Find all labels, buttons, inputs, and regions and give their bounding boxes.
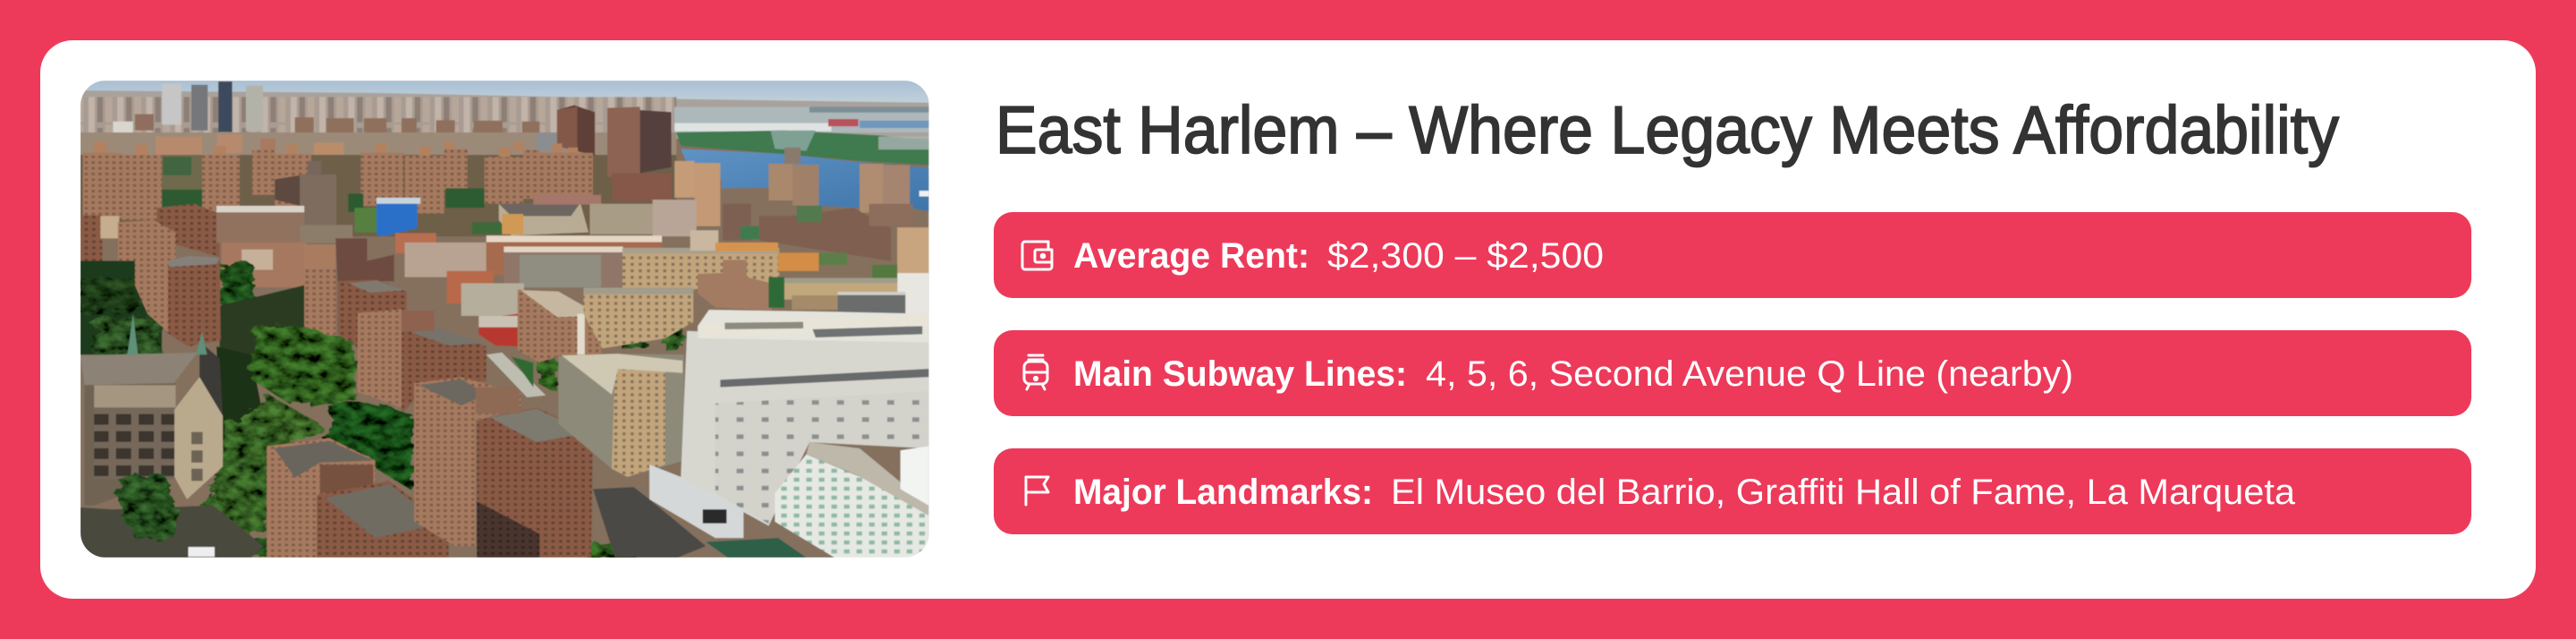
bottom-left shadow park (80, 260, 162, 354)
icon: wallet (1022, 242, 1052, 269)
foreground brick towers (267, 439, 375, 558)
red low building & street (479, 314, 518, 346)
panel: main subway lines (994, 330, 2471, 416)
label: average rent: Average Rent: (1073, 236, 1309, 276)
value: average rent: $2,300 – $2,500 (1327, 236, 1604, 276)
foreground trees left (119, 475, 179, 540)
mid-distance brick row (294, 116, 540, 132)
mid-right small brick (653, 200, 697, 236)
blue building (377, 201, 417, 236)
street at bottom-left (80, 506, 264, 558)
trees between towers (163, 157, 191, 175)
label: major landmarks: Major Landmarks: (1073, 473, 1373, 512)
church mid (499, 203, 589, 235)
value: major landmarks: El Museo del Barrio, Graffiti Hall of Fame, La Marqueta (1391, 473, 2296, 512)
tall towers top-left (162, 84, 182, 124)
dark tall brick towers (557, 105, 595, 156)
value: main subway lines: 4, 5, 6, Second Avenue Q Line (nearby) (1426, 354, 2073, 394)
photo: East Harlem aerial cityscape (80, 81, 928, 558)
green bank and river (676, 131, 928, 165)
panel: average rent (994, 212, 2471, 298)
brick row 2 (80, 215, 102, 266)
left dark shade under trees (216, 345, 261, 453)
label: main subway lines: Main Subway Lines: (1073, 354, 1407, 394)
title: East Harlem – Where Legacy Meets Affordability (996, 92, 2339, 167)
panel: major landmarks (994, 448, 2471, 534)
distant city band (80, 90, 928, 139)
gothic building left (80, 314, 223, 506)
icon: tram (1024, 355, 1047, 389)
central tree mass (204, 322, 685, 558)
tan mid band (487, 238, 662, 275)
icon: flag (1026, 477, 1048, 505)
tan apartment (518, 289, 601, 362)
white low-rise right (775, 455, 928, 558)
central brick towers (304, 269, 335, 338)
hospital (593, 310, 928, 558)
brick tower row (94, 141, 106, 154)
